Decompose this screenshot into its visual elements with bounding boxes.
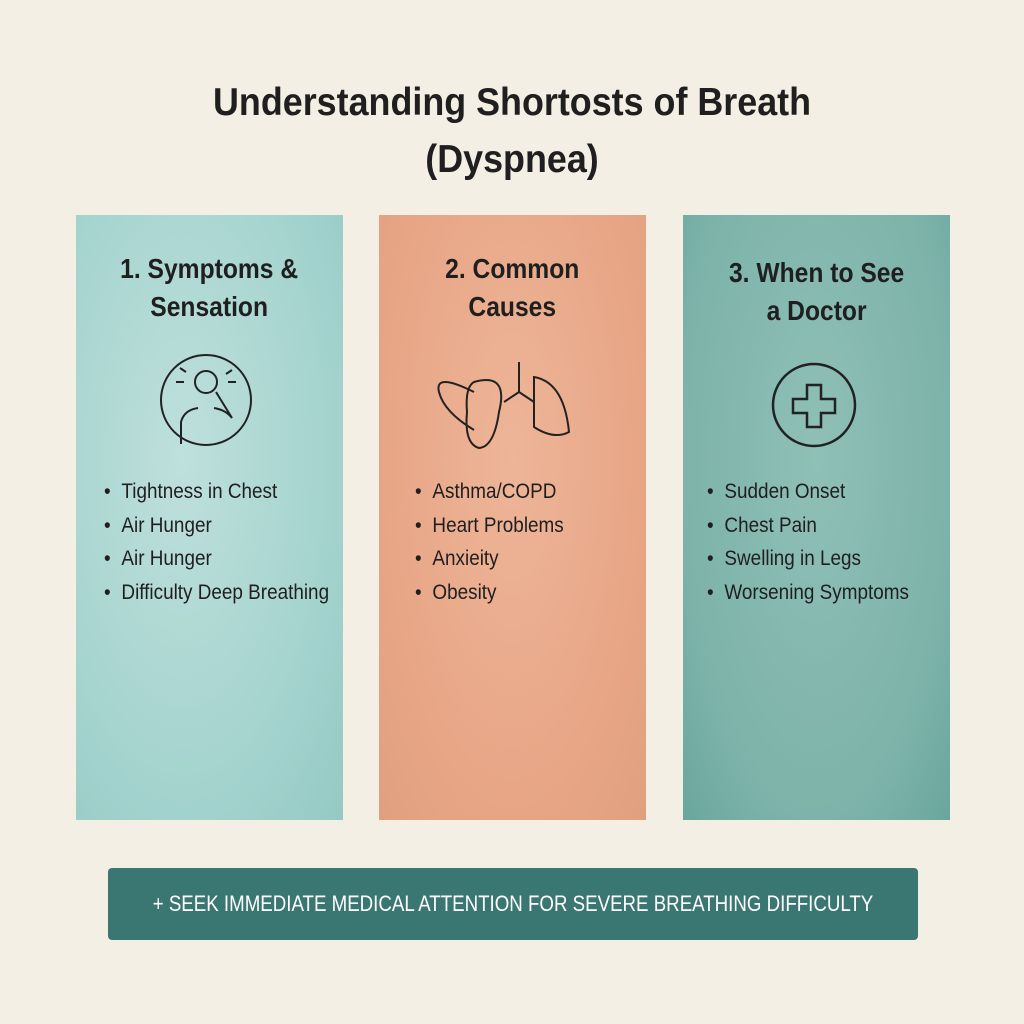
list: doctor: Swelling in Legs [724, 547, 861, 570]
panel: symptoms [76, 215, 343, 820]
heading: causes: 2. Common [445, 253, 580, 284]
list: doctor: Sudden Onset [724, 480, 845, 503]
heading: doctor: a Doctor [767, 295, 866, 326]
list: causes: Obesity [432, 580, 497, 604]
icon: person coughing [160, 354, 252, 446]
list: causes [416, 480, 564, 604]
heading: symptoms: 1. Symptoms & [120, 253, 299, 284]
list: symptoms: Difficulty Deep Breathing [121, 580, 329, 604]
list: causes: Anxieity [432, 547, 499, 570]
list: symptoms: Air Hunger [121, 514, 212, 536]
heading: symptoms: Sensation [151, 291, 268, 322]
icon: heart and lungs [437, 362, 570, 449]
heading: causes [445, 253, 580, 322]
list: doctor: Worsening Symptoms [724, 580, 909, 604]
icon: medical cross [772, 362, 856, 448]
heading: doctor [729, 257, 904, 326]
banner: warning: + SEEK IMMEDIATE MEDICAL ATTENTION FOR SEVERE BREATHING DIFFICULTY [153, 891, 873, 916]
panel: doctor [683, 215, 950, 820]
title [213, 81, 811, 181]
list: doctor: Chest Pain [724, 514, 817, 536]
heading: causes: Causes [469, 291, 556, 322]
panel: causes [379, 215, 646, 820]
heading: symptoms [120, 253, 299, 322]
list: causes: Heart Problems [432, 514, 564, 536]
list: symptoms [104, 480, 329, 604]
list: causes: Asthma/COPD [432, 480, 556, 503]
list: doctor [708, 480, 909, 604]
heading: doctor: 3. When to See [729, 257, 904, 288]
list: symptoms: Air Hunger [121, 547, 212, 570]
title: (Dyspnea) [425, 138, 599, 181]
banner: warning [108, 868, 918, 940]
title: Understanding Shortosts of Breath [213, 81, 811, 124]
list: symptoms: Tightness in Chest [121, 480, 277, 503]
